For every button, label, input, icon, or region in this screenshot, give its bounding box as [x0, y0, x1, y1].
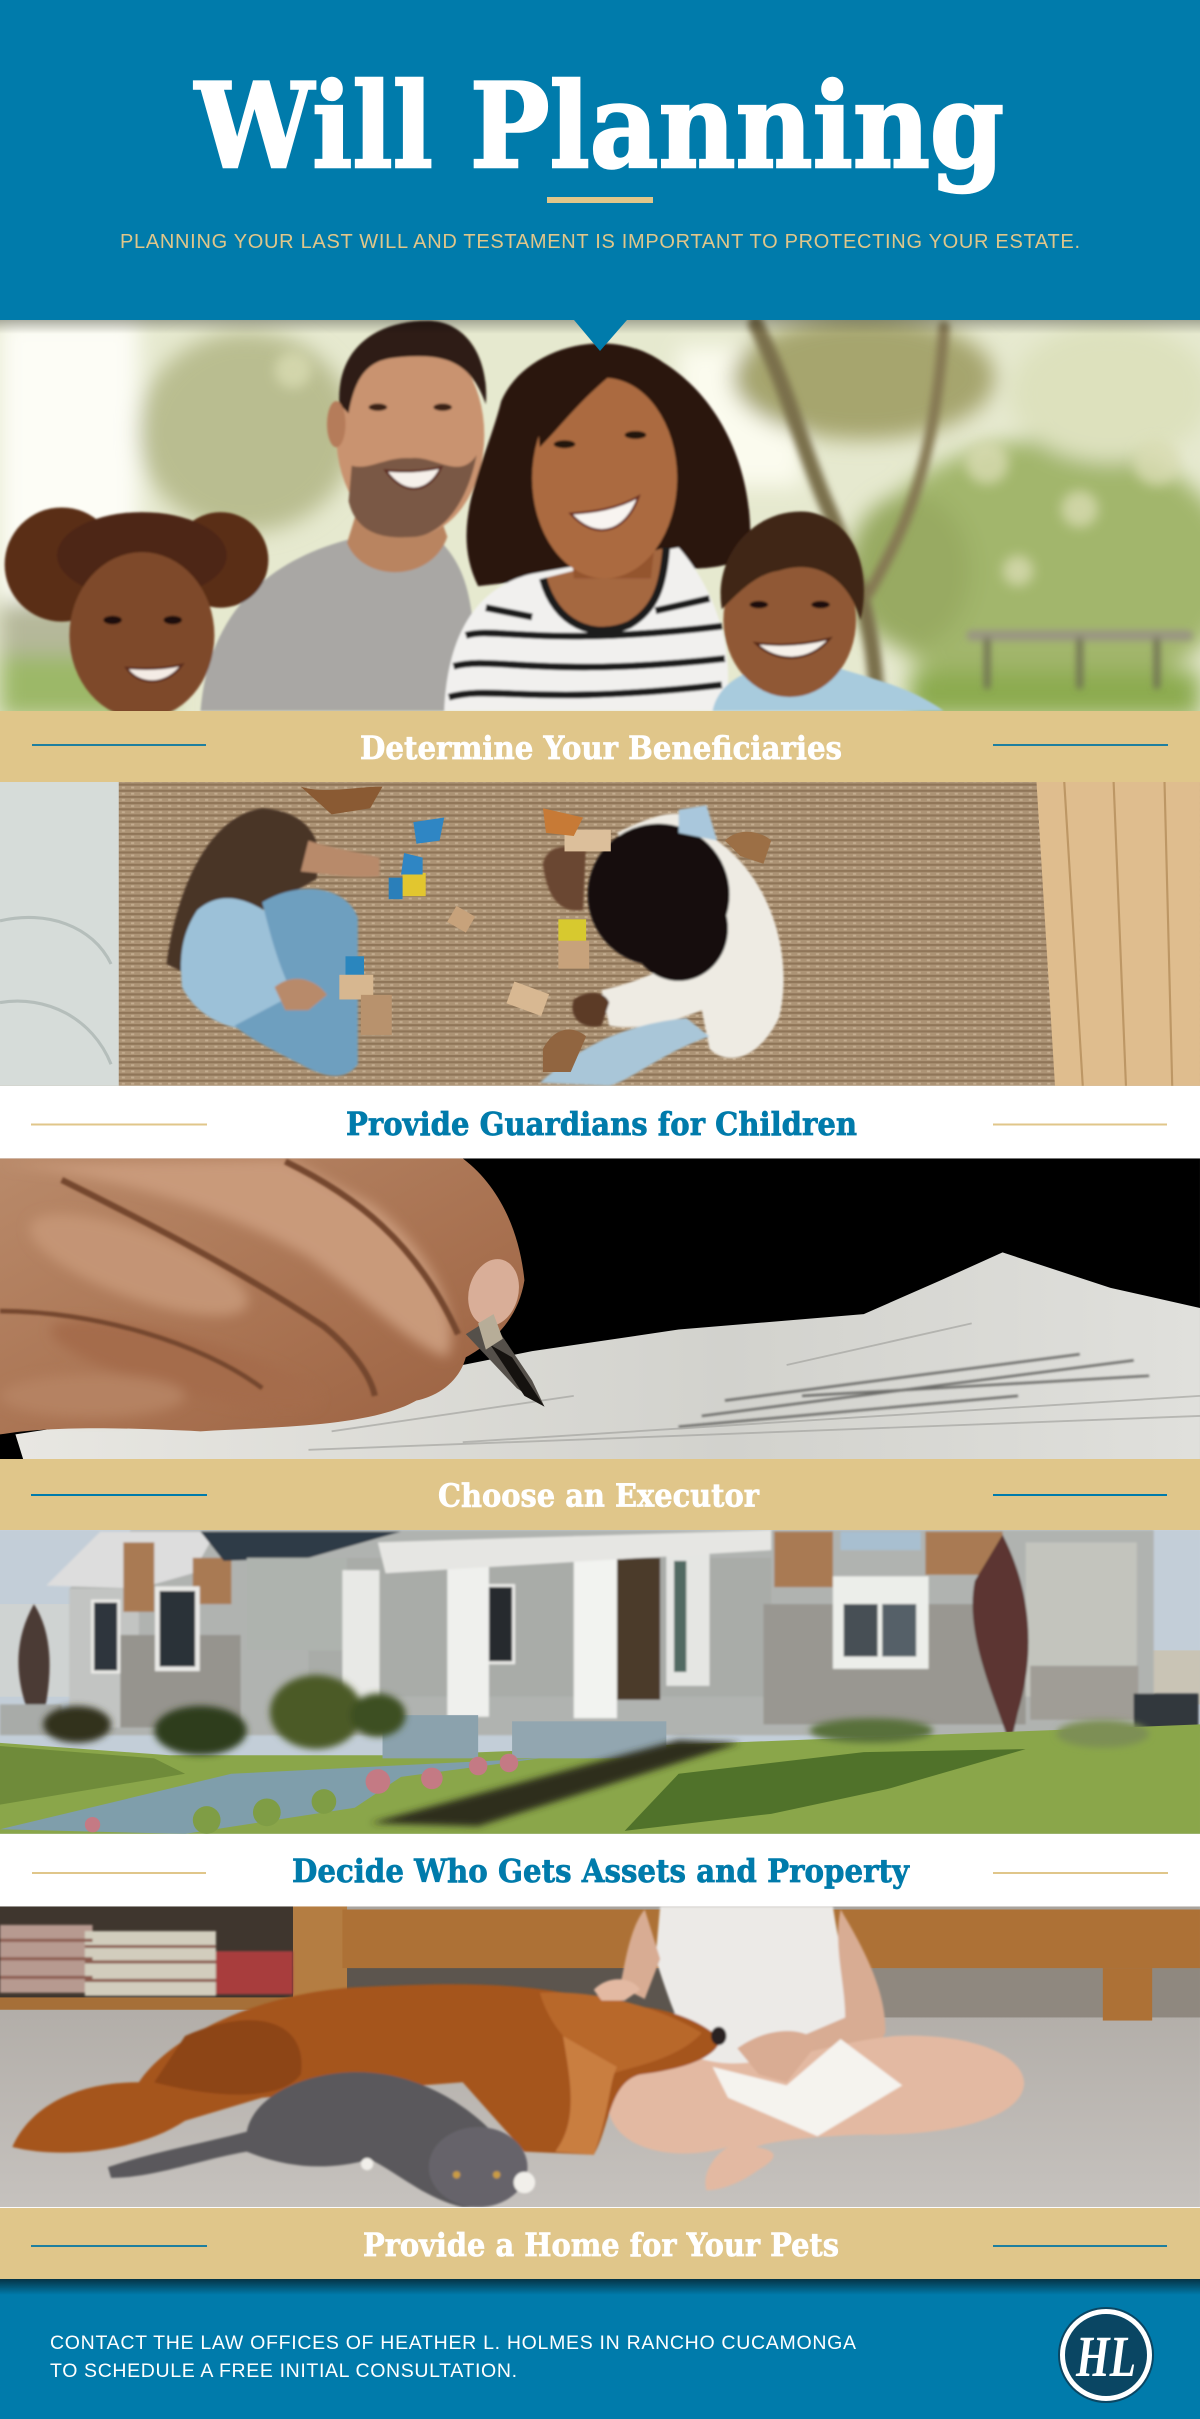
title divider [547, 197, 653, 203]
right child [602, 814, 784, 1058]
contact text [50, 2332, 856, 2382]
band: Decide Who Gets Assets and Property: Decide Who Gets Assets and Property [292, 1852, 910, 1890]
icon: HL law office logo: HL [1075, 2324, 1136, 2389]
girl [167, 808, 319, 972]
contact text: CONTACT THE LAW OFFICES OF HEATHER L. HOLMES IN RANCHO CUCAMONGA [50, 2332, 856, 2354]
band: Provide a Home for Your Pets [0, 2208, 1200, 2279]
band: Provide Guardians for Children: Provide Guardians for Children [346, 1105, 857, 1143]
band: Determine Your Beneficiaries [0, 711, 1200, 782]
blocks [413, 817, 444, 844]
band: Determine Your Beneficiaries: Determine Your Beneficiaries [360, 729, 842, 767]
photo: house with front lawn [0, 1530, 1200, 1834]
photo: woman with dog and cat [0, 1906, 1200, 2207]
band: Choose an Executor [0, 1459, 1200, 1530]
band: Provide a Home for Your Pets: Provide a Home for Your Pets [363, 2226, 839, 2264]
cat [108, 2072, 524, 2207]
woman hair and body [467, 343, 750, 586]
woman [656, 1906, 849, 2075]
contact text: TO SCHEDULE A FREE INITIAL CONSULTATION. [50, 2360, 517, 2382]
photo: hand signing a document [0, 1158, 1200, 1459]
band: Decide Who Gets Assets and Property [0, 1835, 1200, 1906]
header panel [0, 0, 1200, 351]
dog [12, 1984, 720, 2155]
footer panel [0, 2279, 1200, 2419]
band: Provide Guardians for Children [0, 1087, 1200, 1158]
girl [2, 506, 97, 624]
hand and book [594, 1979, 640, 2000]
man [201, 532, 475, 711]
legs [608, 2036, 1024, 2190]
band: Choose an Executor: Choose an Executor [438, 1476, 760, 1514]
subtitle: PLANNING YOUR LAST WILL AND TESTAMENT IS IMPORTANT TO PROTECTING YOUR ESTATE. [120, 231, 1080, 253]
title: Will Planning [193, 57, 1004, 195]
header pointer [574, 320, 627, 351]
boy [713, 666, 944, 711]
photo: children playing with blocks on a rug [0, 782, 1200, 1086]
icon: HL law office logo [1058, 2307, 1154, 2403]
photo: smiling family outdoors [0, 316, 1200, 719]
